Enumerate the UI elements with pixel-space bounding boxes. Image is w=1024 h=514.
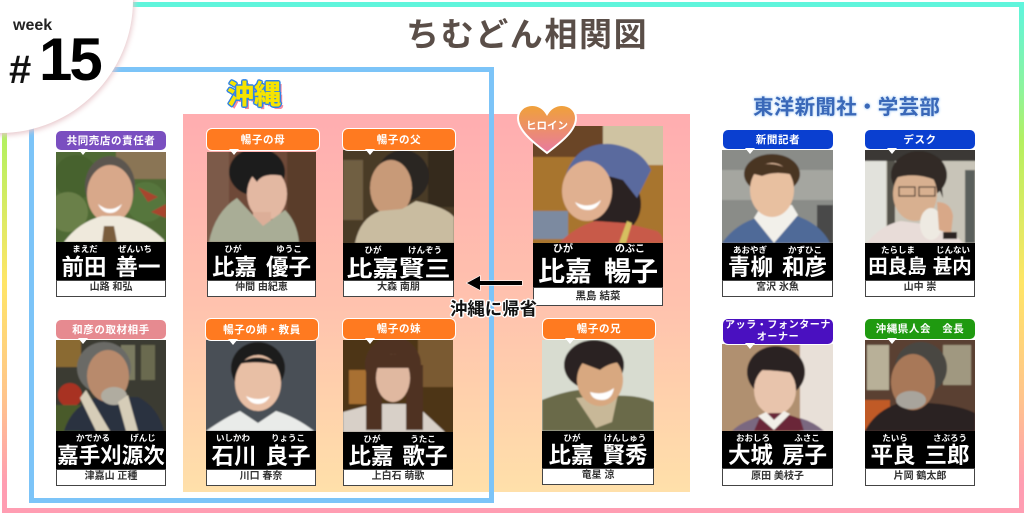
actor name: 竜星 涼 bbox=[582, 470, 614, 481]
character name: 田良島 bbox=[868, 256, 927, 278]
role label bbox=[864, 318, 976, 340]
role label: 和彦の取材相手 bbox=[72, 324, 150, 336]
portrait bbox=[722, 344, 833, 431]
card: Higa Kenzo bbox=[342, 128, 456, 297]
actor name: 黒島 結菜 bbox=[576, 290, 620, 302]
character name: 歌子 bbox=[402, 444, 448, 469]
actor name: 原田 美枝子 bbox=[751, 471, 804, 482]
name band bbox=[542, 431, 654, 468]
arrow: return to Okinawa bbox=[466, 275, 523, 291]
portrait bbox=[207, 152, 316, 242]
character name: 比嘉 bbox=[212, 255, 257, 280]
role label: 共同売店の責任者 bbox=[67, 134, 155, 146]
actor name bbox=[722, 468, 833, 486]
actor name: 上白石 萌歌 bbox=[372, 471, 424, 482]
week label: week bbox=[13, 17, 52, 34]
card: Higa Yuko bbox=[206, 128, 320, 297]
character name: 前田 bbox=[61, 255, 106, 280]
role label: 暢子の兄 bbox=[577, 323, 621, 335]
role label bbox=[342, 318, 456, 340]
card: Oshiro Fusako bbox=[722, 319, 833, 486]
name band bbox=[56, 242, 166, 280]
character name bbox=[728, 443, 827, 468]
character name: 平良 bbox=[870, 443, 916, 468]
actor name bbox=[722, 280, 833, 297]
title: ちむどん相関図 bbox=[406, 16, 648, 53]
portrait bbox=[722, 150, 833, 243]
name band bbox=[343, 432, 453, 469]
card: Taira Saburo bbox=[865, 319, 975, 486]
furigana given: ぜんいち bbox=[118, 244, 152, 254]
card: Higa Kenshu bbox=[542, 318, 656, 485]
character name: 三郎 bbox=[924, 443, 970, 468]
furigana family: かでかる bbox=[76, 433, 110, 443]
portrait bbox=[343, 340, 453, 432]
role label bbox=[722, 318, 834, 345]
name band bbox=[722, 243, 833, 280]
character name: 比嘉 bbox=[548, 443, 594, 468]
actor name bbox=[343, 280, 454, 297]
character name bbox=[212, 255, 311, 280]
character name: 優子 bbox=[266, 255, 311, 280]
card: Tarashima Jinnai bbox=[865, 130, 975, 297]
furigana given: かずひこ bbox=[788, 245, 822, 255]
furigana family: いしかわ bbox=[216, 433, 250, 443]
name band bbox=[865, 243, 975, 280]
furigana family: おおしろ bbox=[736, 433, 770, 443]
actor name bbox=[207, 280, 316, 297]
role label bbox=[206, 128, 320, 151]
role label: 沖縄県人会 会長 bbox=[876, 323, 964, 335]
character name: 比嘉 bbox=[348, 444, 394, 469]
role label: 暢子の母 bbox=[241, 134, 285, 146]
character name bbox=[868, 256, 972, 278]
role label: オーナー bbox=[757, 332, 799, 342]
card: Aoyagi Kazuhiko bbox=[722, 130, 833, 297]
character name bbox=[728, 255, 827, 280]
card: Kadekaru Genji bbox=[56, 320, 166, 486]
portrait bbox=[206, 340, 316, 431]
furigana given: げんじ bbox=[130, 433, 156, 443]
portrait bbox=[56, 152, 166, 242]
actor name bbox=[206, 469, 316, 486]
character name: 石川 bbox=[211, 444, 256, 469]
furigana given: けんしゅう bbox=[604, 433, 646, 443]
role label: 暢子の姉・教員 bbox=[223, 324, 301, 336]
portrait bbox=[542, 340, 654, 431]
role label: 新聞記者 bbox=[756, 134, 800, 146]
role label bbox=[205, 318, 319, 341]
actor name: 山路 和弘 bbox=[90, 282, 132, 293]
furigana given: うたこ bbox=[410, 434, 436, 444]
arrow caption: 沖縄に帰省 bbox=[450, 299, 537, 319]
character name: 善一 bbox=[116, 255, 161, 280]
character name: 良子 bbox=[266, 444, 311, 469]
furigana given: さぶろう bbox=[933, 433, 967, 443]
heading: Toyo Shimbun: 東洋新聞社・学芸部 bbox=[753, 96, 940, 119]
furigana given: けんぞう bbox=[408, 245, 442, 255]
furigana given: のぶこ bbox=[615, 244, 645, 255]
role label bbox=[722, 129, 834, 150]
character name bbox=[538, 257, 658, 287]
week number: 15 bbox=[39, 26, 100, 93]
character name: 和彦 bbox=[782, 255, 827, 280]
furigana given: じんない bbox=[936, 245, 970, 255]
actor name: 仲間 由紀恵 bbox=[235, 282, 288, 293]
role label bbox=[55, 130, 167, 151]
actor name: 川口 春奈 bbox=[240, 471, 282, 482]
character name: 比嘉賢三 bbox=[346, 255, 450, 282]
badge: heroine heart: ヒロイン bbox=[526, 120, 568, 132]
character name: 青柳 bbox=[728, 255, 773, 280]
portrait bbox=[56, 340, 166, 431]
actor name: 山中 崇 bbox=[904, 282, 936, 293]
furigana family: ひが bbox=[224, 244, 242, 254]
role label: 暢子の父 bbox=[377, 134, 421, 146]
name band bbox=[56, 431, 166, 469]
character name bbox=[348, 444, 448, 469]
character name: 嘉手刈源次 bbox=[57, 444, 165, 468]
card: Higa Utako bbox=[342, 318, 456, 486]
actor name: 大森 南朋 bbox=[377, 282, 420, 293]
role label bbox=[864, 129, 976, 150]
name band bbox=[722, 431, 833, 468]
character name: 賢秀 bbox=[602, 443, 648, 468]
character name bbox=[548, 443, 648, 468]
character name: 比嘉 bbox=[538, 257, 592, 287]
role label: アッラ・フォンターナ bbox=[725, 320, 831, 330]
portrait bbox=[343, 150, 454, 243]
actor name bbox=[56, 280, 166, 297]
role label bbox=[55, 319, 167, 340]
role label bbox=[542, 318, 656, 340]
character name: 暢子 bbox=[604, 257, 658, 287]
actor name bbox=[865, 468, 975, 486]
frame: Okinawa return group bbox=[29, 67, 494, 503]
heading: Okinawa: 沖縄 bbox=[227, 80, 281, 110]
role label bbox=[342, 128, 456, 151]
furigana given: ゆうこ bbox=[276, 244, 302, 254]
actor name bbox=[533, 287, 663, 306]
week badge bbox=[0, 0, 133, 133]
actor name: 津嘉山 正種 bbox=[85, 471, 137, 482]
furigana family: たらしま bbox=[881, 245, 915, 255]
furigana family: たいら bbox=[882, 433, 908, 443]
card: Ishikawa Ryoko bbox=[205, 318, 319, 486]
name band bbox=[533, 243, 663, 287]
furigana family: あおやぎ bbox=[733, 245, 767, 255]
character name bbox=[61, 255, 161, 280]
character name: 甚内 bbox=[933, 256, 972, 278]
furigana given: りょうこ bbox=[271, 433, 305, 443]
furigana family: まえだ bbox=[72, 244, 98, 254]
name band bbox=[865, 431, 975, 468]
portrait bbox=[865, 150, 975, 243]
actor name bbox=[343, 469, 453, 486]
character name: 大城 bbox=[728, 443, 773, 468]
furigana given: ふさこ bbox=[794, 433, 820, 443]
name band bbox=[343, 243, 454, 280]
furigana family: ひが bbox=[363, 434, 381, 444]
actor name bbox=[865, 280, 975, 297]
card: Higa Nobuko bbox=[533, 126, 663, 306]
role label: 暢子の妹 bbox=[377, 323, 421, 335]
panel: Okinawa background bbox=[183, 114, 690, 492]
actor name bbox=[542, 468, 654, 485]
furigana family: ひが bbox=[553, 244, 573, 255]
furigana family: ひが bbox=[364, 245, 382, 255]
card: Maeda Zenichi bbox=[56, 131, 166, 297]
name band bbox=[206, 431, 316, 469]
portrait bbox=[533, 126, 663, 243]
role label: デスク bbox=[903, 134, 937, 146]
actor name: 宮沢 氷魚 bbox=[756, 282, 799, 293]
hash mark: # bbox=[9, 48, 31, 92]
portrait bbox=[865, 340, 975, 431]
actor name: 片岡 鶴太郎 bbox=[894, 471, 946, 482]
actor name bbox=[56, 469, 166, 486]
name band bbox=[207, 242, 316, 280]
character name bbox=[870, 443, 970, 468]
badge: heroine heart bbox=[517, 106, 577, 154]
character name: 房子 bbox=[782, 443, 827, 468]
character name bbox=[211, 444, 311, 469]
furigana family: ひが bbox=[563, 433, 581, 443]
